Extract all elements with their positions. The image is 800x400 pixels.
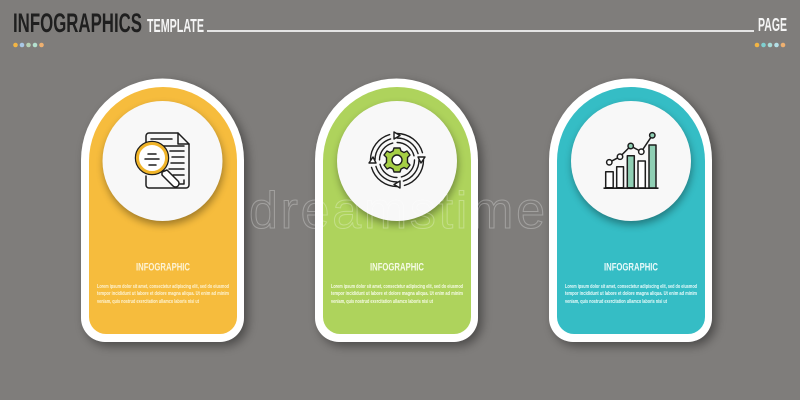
card 3 body text: Lorem ipsum dolor sit amet, consectetur adipiscing elit, sed do eiusmod <box>565 284 697 290</box>
panel: card 2 green <box>315 78 482 346</box>
icon: document with magnifier <box>136 133 189 188</box>
card 3 body text <box>565 284 697 305</box>
watermark: dreamstime <box>249 182 545 240</box>
header: right dots <box>755 43 785 47</box>
card 2 body text: Lorem ipsum dolor sit amet, consectetur adipiscing elit, sed do eiusmod <box>331 284 463 290</box>
card 1 body text: tempor incididunt ut labore et dolore magna aliqua. Ut enim ad minim <box>97 291 229 297</box>
icon: gear with circular arrows <box>369 132 425 188</box>
panel: card 3 teal <box>549 78 716 346</box>
card 1 body text <box>97 284 229 305</box>
card 2 body text: veniam, quis nostrud exercitation ullamco laboris nisi ut <box>331 299 433 305</box>
card 2 body text <box>331 284 463 305</box>
card 3 body text: tempor incididunt ut labore et dolore magna aliqua. Ut enim ad minim <box>565 291 697 297</box>
panel: card 1 yellow <box>81 78 248 346</box>
header: left dots <box>13 43 44 47</box>
card 3 body text: veniam, quis nostrud exercitation ullamco laboris nisi ut <box>565 299 667 305</box>
header: left title: INFOGRAPHICS <box>13 8 142 38</box>
card 1 body text: Lorem ipsum dolor sit amet, consectetur adipiscing elit, sed do eiusmod <box>97 284 229 290</box>
card 1 heading: INFOGRAPHIC <box>136 262 190 274</box>
card 2 body text: tempor incididunt ut labore et dolore magna aliqua. Ut enim ad minim <box>331 291 463 297</box>
card 3 heading: INFOGRAPHIC <box>604 262 658 274</box>
header: rule line <box>207 30 754 32</box>
card 2 heading: INFOGRAPHIC <box>370 262 424 274</box>
icon: rising bar chart with trend line <box>604 133 658 188</box>
header: left title: TEMPLATE <box>147 16 204 36</box>
card 1 body text: veniam, quis nostrud exercitation ullamco laboris nisi ut <box>97 299 199 305</box>
